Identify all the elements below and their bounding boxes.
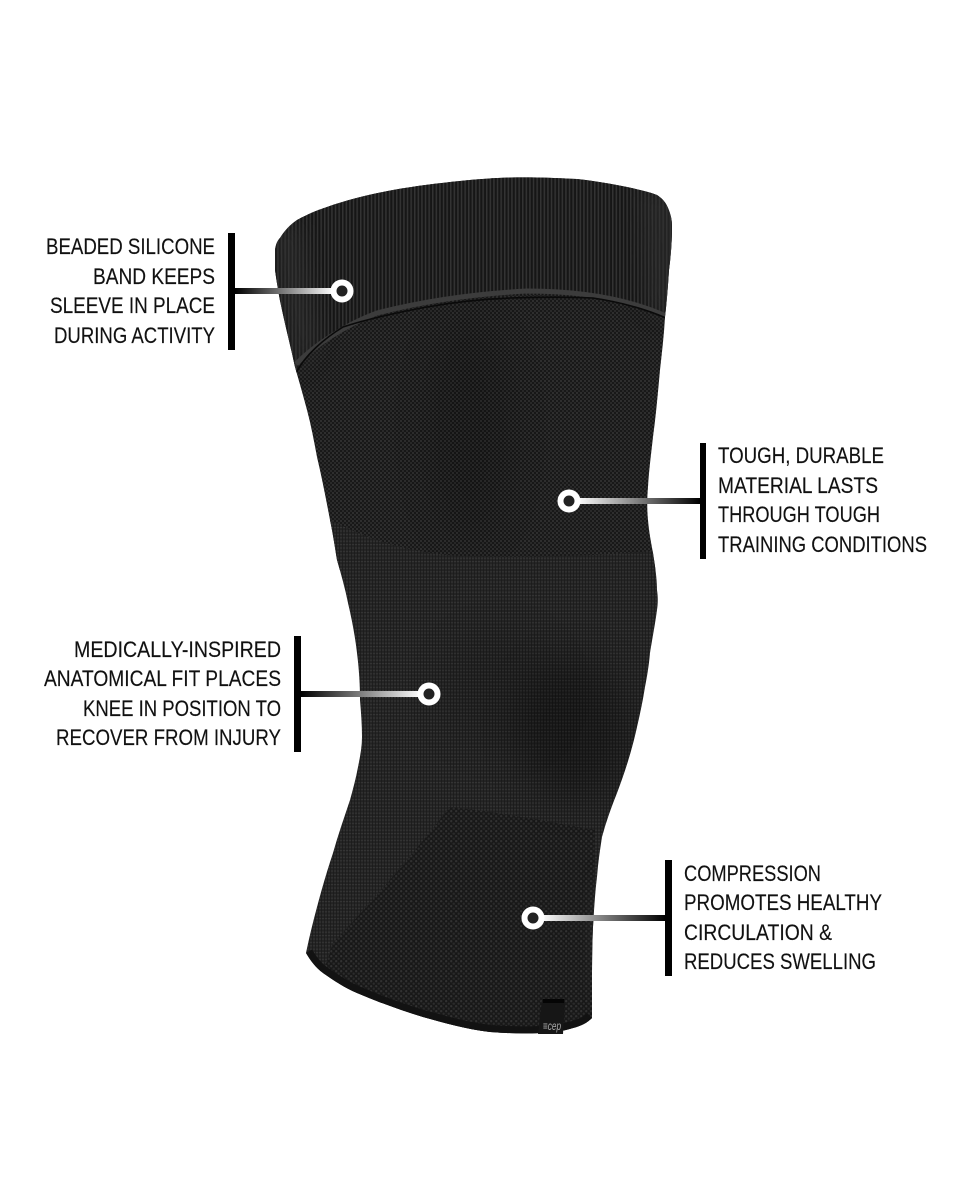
callout text: KNEE IN POSITION TO — [83, 696, 281, 721]
callout text: RECOVER FROM INJURY — [56, 725, 281, 750]
lower coarse knit panel — [323, 808, 595, 1034]
callout text: ANATOMICAL FIT PLACES — [44, 666, 281, 691]
callout text: TOUGH, DURABLE — [718, 443, 884, 468]
top band ribbing — [260, 170, 680, 372]
callout text: MEDICALLY-INSPIRED — [74, 637, 281, 662]
callout: beaded silicone band — [46, 233, 350, 350]
leader line — [235, 288, 335, 294]
callout text: MATERIAL LASTS — [718, 473, 878, 498]
callout: medically-inspired anatomical fit — [44, 636, 438, 752]
brand tag — [538, 999, 565, 1034]
callout text — [718, 443, 927, 557]
callout: compression circulation — [524, 860, 882, 976]
callout text: REDUCES SWELLING — [684, 949, 876, 974]
marker — [334, 282, 350, 300]
band seam stitching — [296, 291, 666, 364]
marker — [524, 910, 542, 926]
callout text — [46, 234, 215, 348]
callout text — [684, 861, 882, 974]
bracket bar — [228, 233, 235, 350]
leader line — [576, 498, 700, 504]
band seam dark line — [296, 297, 666, 373]
knee zone shadows — [526, 670, 624, 790]
marker — [420, 686, 438, 702]
callout text: THROUGH TOUGH — [718, 502, 880, 527]
knee sleeve product image — [260, 170, 680, 1040]
upper panel central shadow — [430, 320, 510, 540]
callout text: TRAINING CONDITIONS — [718, 532, 927, 557]
bracket bar — [700, 443, 706, 559]
callout text: DURING ACTIVITY — [54, 323, 215, 348]
band edge shading — [275, 229, 313, 354]
callout: tough durable material — [560, 443, 927, 559]
lower hem — [306, 953, 592, 1033]
bracket bar — [294, 636, 301, 752]
callout text: BEADED SILICONE — [46, 234, 215, 259]
callout text — [44, 637, 281, 750]
leader line — [540, 915, 665, 921]
callout text: SLEEVE IN PLACE — [50, 293, 215, 318]
brand tag: ≡cep — [543, 1019, 561, 1033]
knee zone fine knit — [306, 520, 658, 1034]
callout text: BAND KEEPS — [93, 264, 215, 289]
sleeve upper knit panel — [260, 170, 680, 570]
callout text: COMPRESSION — [684, 861, 821, 886]
callout text: PROMOTES HEALTHY — [684, 890, 882, 915]
leader line — [301, 691, 422, 697]
marker — [560, 492, 578, 510]
bracket bar — [665, 860, 672, 976]
callout text: CIRCULATION & — [684, 920, 832, 945]
